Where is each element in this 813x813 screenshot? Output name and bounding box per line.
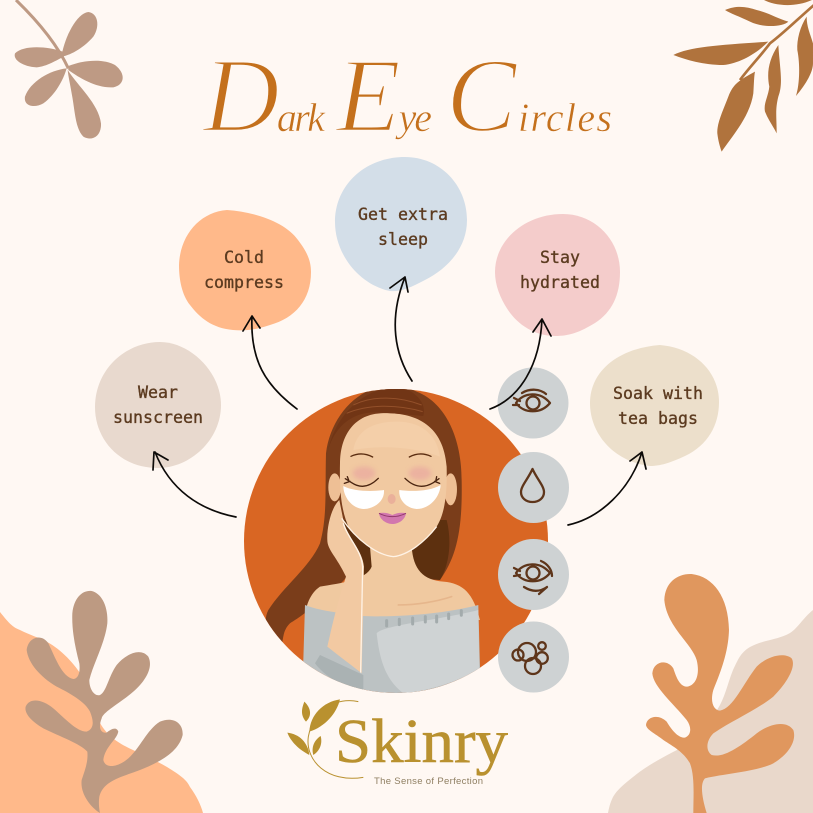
leaf: top right (673, 0, 813, 152)
icon: water drop (498, 452, 569, 523)
forehead highlight (353, 422, 440, 457)
tip: get extra sleep: Get extra (358, 205, 448, 224)
blush (353, 467, 375, 480)
corner shape: bottom left blob (0, 612, 203, 813)
logo: Skinry: Skinry (335, 708, 508, 776)
tip: stay hydrated: hydrated (520, 273, 600, 292)
logo emblem (287, 699, 363, 778)
title: Dark (201, 37, 326, 154)
tip: soak with tea bags: Soak with (613, 384, 703, 403)
chin outline (342, 518, 437, 557)
tip: stay hydrated: Stay (540, 248, 580, 267)
icon: eye with under-eye arrow (498, 539, 569, 610)
tip: stay hydrated (495, 214, 620, 336)
under-eye patches (343, 486, 384, 509)
tip: get extra sleep (335, 157, 467, 291)
leaf: bottom left (25, 591, 183, 813)
title: Circles (446, 37, 612, 154)
blouse (300, 605, 480, 700)
face (340, 413, 447, 557)
illustration: woman with under-eye patches (266, 385, 480, 700)
tip: soak with tea bags (590, 345, 719, 466)
lips (379, 513, 406, 524)
closed eyes and lashes (344, 477, 440, 486)
tip: cold compress: Cold (224, 248, 264, 267)
hair top (330, 389, 424, 443)
shadow hair under chin (340, 520, 449, 580)
shoulder crease (398, 597, 452, 605)
neck and shoulders (305, 547, 480, 620)
tip: cold compress (179, 210, 311, 330)
logo: Skinry (287, 699, 508, 787)
arrow: to soak with tea bags (568, 452, 646, 525)
logo: Skinry: The Sense of Perfection (374, 776, 483, 787)
tip: cold compress: compress (204, 273, 284, 292)
arrow: to cold compress (243, 316, 297, 409)
corner shape: bottom right blob (608, 610, 813, 813)
title (201, 37, 612, 154)
ears (328, 473, 341, 501)
tip: wear sunscreen: Wear (138, 383, 178, 402)
blouse stitches (387, 611, 461, 626)
nose (388, 494, 396, 504)
tip: get extra sleep: sleep (378, 230, 428, 249)
arrow: to get extra sleep (390, 277, 412, 381)
sleeve cuff (315, 655, 363, 692)
portrait circle (244, 389, 548, 693)
tip: wear sunscreen (95, 342, 221, 468)
eyebrows (351, 454, 431, 457)
hair (266, 385, 462, 647)
icon: eye with lashes (498, 368, 568, 438)
leaf: bottom right (646, 574, 794, 813)
arrow: to wear sunscreen (153, 452, 236, 517)
title: Eye (334, 37, 432, 154)
tip: soak with tea bags: tea bags (618, 409, 698, 428)
arrow: to stay hydrated (490, 319, 551, 409)
blouse front (377, 610, 479, 693)
tip: wear sunscreen: sunscreen (113, 408, 203, 427)
leaf: top left (15, 0, 123, 139)
icon: bubbles (498, 622, 569, 692)
forearm and hand (327, 500, 364, 673)
